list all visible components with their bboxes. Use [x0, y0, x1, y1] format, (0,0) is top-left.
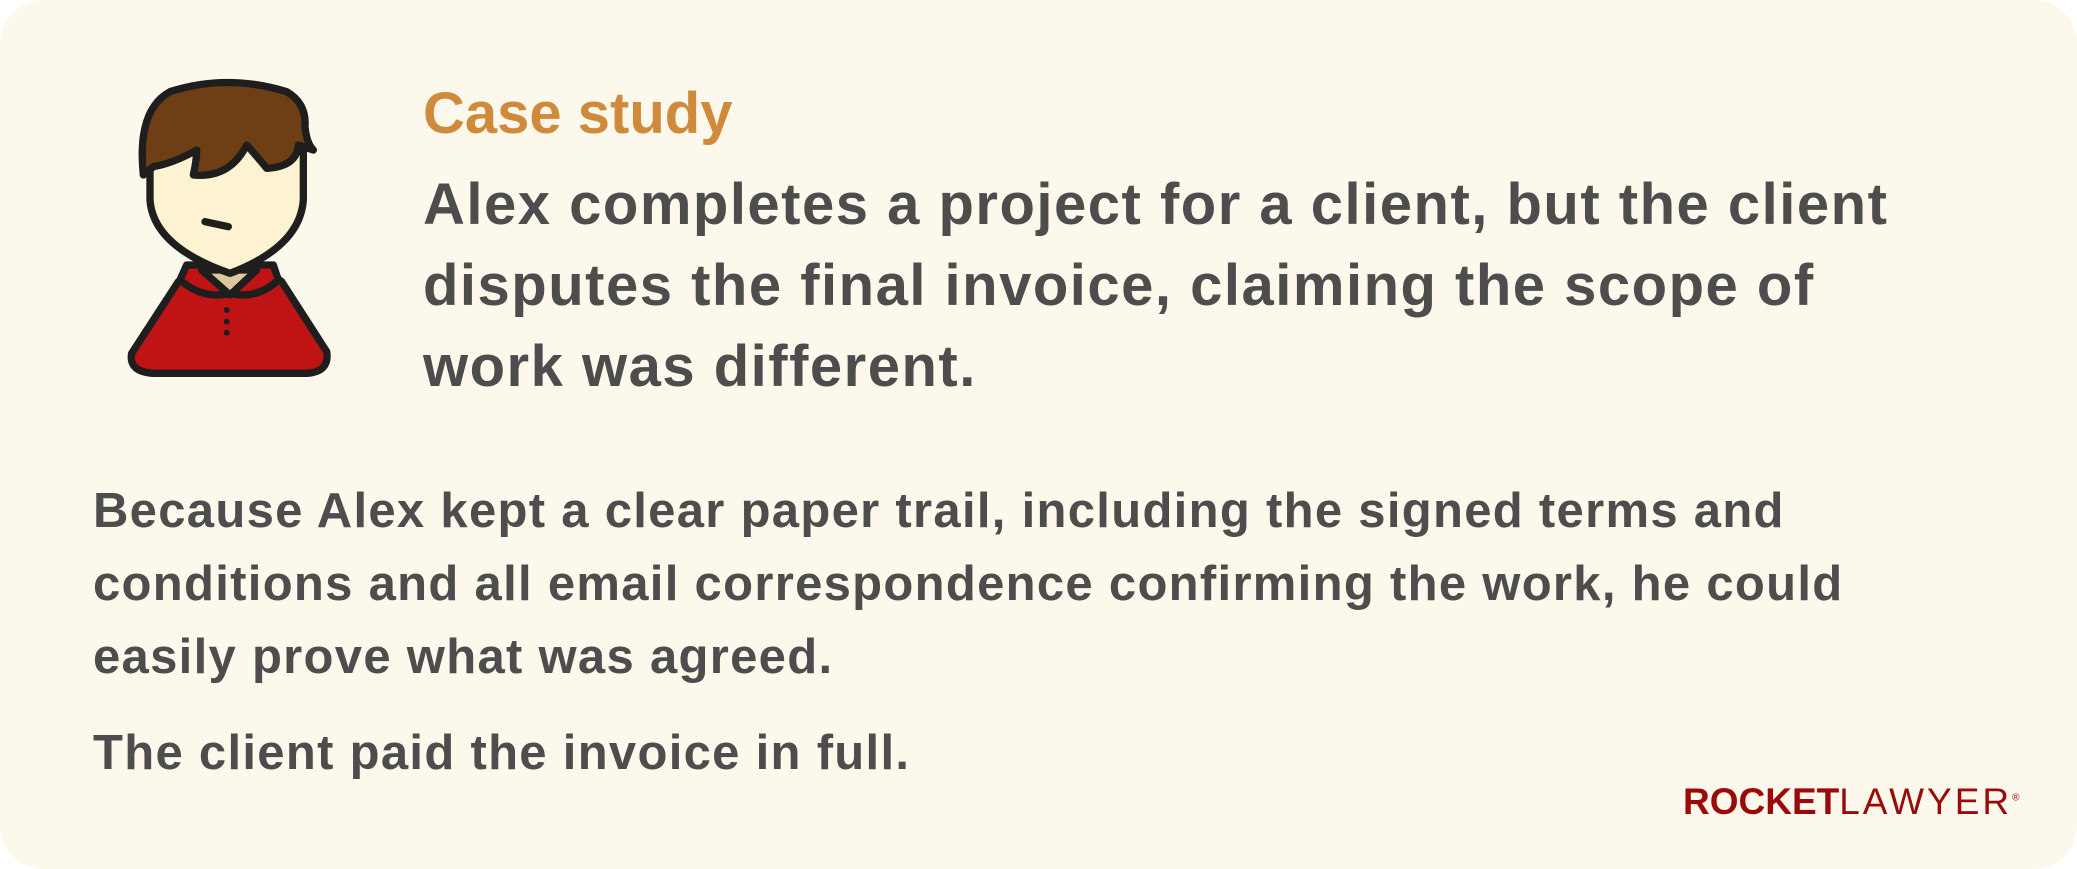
heading: case study: Case study: [423, 81, 732, 146]
text: scenario: disputes the final invoice, claiming the scope of: [423, 253, 1815, 318]
icon: avatar: [128, 78, 331, 377]
text: scenario: work was different.: [423, 334, 977, 399]
text: outcome paragraph: conditions and all email correspondence confirming the work, he could: [93, 557, 1844, 611]
text: outcome paragraph: easily prove what was agreed.: [93, 630, 833, 684]
text: outcome paragraph: Because Alex kept a clear paper trail, including the signed terms and: [93, 484, 1785, 538]
logo: rocket lawyer: ROCKETLAWYER®: [1683, 781, 2020, 822]
text: outcome paragraph: [93, 484, 1844, 684]
text: conclusion: The client paid the invoice in full.: [93, 726, 910, 780]
text: scenario: Alex completes a project for a client, but the client: [423, 172, 1888, 237]
text: scenario: [422, 172, 1888, 399]
